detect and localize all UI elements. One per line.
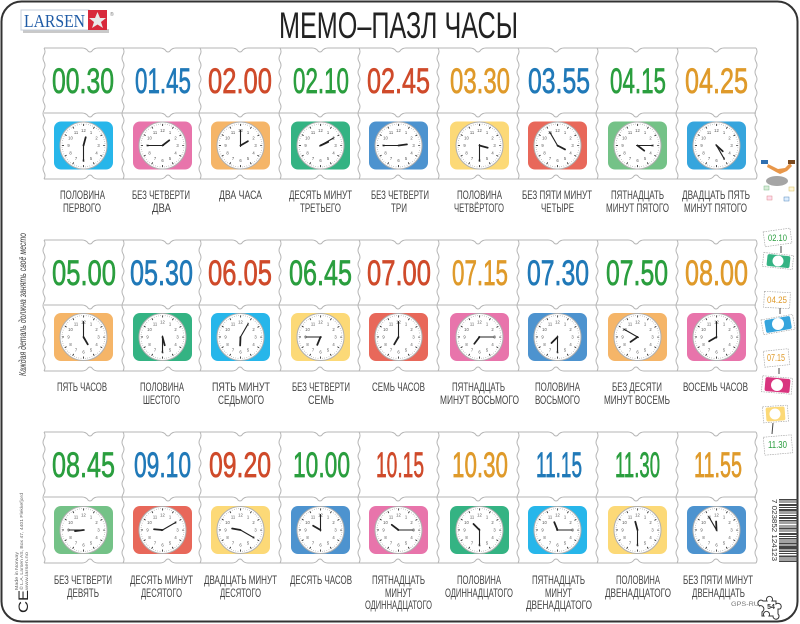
piece 07.00: 07.00 — [367, 254, 431, 293]
piece 03.30 — [450, 62, 510, 215]
piece 10.30: ОДИННАДЦАТОГО — [445, 586, 513, 600]
piece 04.15 — [606, 62, 669, 215]
piece 08.00: 08.00 — [685, 254, 748, 293]
piece 10.15 — [365, 446, 432, 612]
piece 03.55: 03.55 — [528, 62, 590, 101]
piece 02.45: БЕЗ ЧЕТВЕРТИ — [371, 188, 429, 202]
piece 10.30: ПОЛОВИНА — [457, 573, 501, 587]
piece 11.30 — [605, 446, 671, 600]
piece 02.00: 02.00 — [208, 62, 272, 101]
legal text, rotated: Made in Norway — [14, 551, 19, 590]
piece 11.55: ДВЕНАДЦАТЬ — [692, 586, 745, 600]
piece 09.20: ДЕСЯТОГО — [220, 586, 261, 600]
piece 07.50: БЕЗ ДЕСЯТИ — [612, 380, 662, 394]
piece 11.30: 11.30 — [615, 446, 660, 485]
piece 04.15: ПЯТНАДЦАТЬ — [611, 188, 664, 202]
piece 09.10: ДЕСЯТЬ МИНУТ — [130, 573, 193, 587]
piece 07.15 — [440, 254, 519, 407]
piece 07.30: 07.30 — [527, 254, 589, 293]
piece 02.10: ТРЕТЬЕГО — [300, 201, 341, 215]
piece 08.00 — [683, 254, 748, 394]
instruction pair: 11.30: 11.30 — [768, 440, 787, 451]
piece 01.45: БЕЗ ЧЕТВЕРТИ — [132, 188, 190, 202]
piece 09.20: ДВАДЦАТЬ МИНУТ — [204, 573, 277, 587]
piece 10.30: 10.30 — [452, 446, 508, 485]
piece 02.10 — [289, 62, 352, 215]
piece 06.45: СЕМЬ — [308, 393, 334, 407]
piece 05.00: ПЯТЬ ЧАСОВ — [57, 380, 107, 394]
piece 02.00 — [208, 62, 272, 202]
piece 06.45 — [289, 254, 352, 407]
instruction pair: 02.10 — [762, 228, 794, 270]
puzzle outline row 3 — [43, 432, 757, 563]
piece 03.55 — [522, 62, 592, 215]
piece 06.45: БЕЗ ЧЕТВЕРТИ — [292, 380, 350, 394]
legal text, rotated — [14, 493, 29, 590]
piece 00.30: ПОЛОВИНА — [60, 188, 105, 202]
piece 07.15: ПЯТНАДЦАТЬ — [452, 380, 505, 394]
piece 01.45: 01.45 — [135, 62, 191, 101]
piece 10.00: ДЕСЯТЬ ЧАСОВ — [290, 573, 352, 587]
logo: Larsen: ® — [110, 11, 114, 18]
piece 02.10: 02.10 — [293, 62, 349, 101]
piece 07.00: СЕМЬ ЧАСОВ — [372, 380, 425, 394]
instruction text, rotated: Каждая деталь должна занять своё место — [18, 233, 29, 376]
piece 05.30 — [130, 254, 193, 407]
barcode: 7 023852 124123 — [770, 499, 777, 561]
piece 07.50: МИНУТ ВОСЕМЬ — [604, 393, 670, 407]
logo: Larsen: LARSEN — [24, 11, 85, 31]
panel: row 2 — [43, 240, 757, 407]
piece 01.45: ДВА — [152, 201, 171, 215]
piece 07.50 — [604, 254, 670, 407]
piece 06.45: 06.45 — [289, 254, 352, 293]
instruction pair: 07.15: 07.15 — [767, 353, 785, 364]
CE mark: CE — [15, 590, 31, 613]
piece 05.30: ПОЛОВИНА — [140, 380, 184, 394]
piece 05.00 — [52, 254, 116, 394]
instruction pair: 04.25: 04.25 — [767, 295, 787, 305]
piece 03.30: ЧЕТВЁРТОГО — [454, 201, 504, 215]
piece 07.30 — [527, 254, 589, 407]
piece 01.45 — [132, 62, 192, 215]
piece 07.30: ПОЛОВИНА — [535, 380, 580, 394]
panel: row 1 — [43, 48, 757, 215]
instruction pair: 07.15 — [761, 349, 793, 394]
piece 07.30: ВОСЬМОГО — [535, 393, 580, 407]
piece 10.15: МИНУТ — [385, 586, 412, 600]
title: МЕМО–ПАЗЛ ЧАСЫ — [279, 5, 518, 46]
piece 05.30: 05.30 — [130, 254, 193, 293]
instruction pair: 11.30 — [762, 405, 793, 455]
piece 11.15: ДВЕНАДЦАТОГО — [526, 598, 592, 612]
legal text, rotated: www.larsen.no — [24, 551, 29, 590]
piece 08.45: ДЕВЯТЬ — [67, 586, 99, 600]
legal text, rotated: © L.A. Larsen AS, Box 47, 4401 Flekkefjord — [18, 493, 24, 590]
piece 08.45: БЕЗ ЧЕТВЕРТИ — [54, 573, 112, 587]
panel: row 3 — [43, 432, 757, 612]
piece 02.10: ДЕСЯТЬ МИНУТ — [289, 188, 352, 202]
piece 11.55: БЕЗ ПЯТИ МИНУТ — [683, 573, 753, 587]
piece 10.00 — [290, 446, 352, 587]
icon: puzzle piece count 54: 54 — [767, 604, 775, 611]
barcode — [770, 499, 788, 562]
piece 10.15: 10.15 — [376, 446, 424, 485]
piece 00.30 — [52, 62, 114, 215]
piece 07.15: 07.15 — [452, 254, 508, 293]
piece 04.25: МИНУТ ПЯТОГО — [684, 201, 747, 215]
piece 05.00: 05.00 — [52, 254, 116, 293]
piece 08.00: ВОСЕМЬ ЧАСОВ — [683, 380, 748, 394]
piece 07.50: 07.50 — [606, 254, 668, 293]
piece 02.45: 02.45 — [367, 62, 430, 101]
product code: GPS-RU — [731, 601, 759, 608]
piece 02.45: ТРИ — [391, 201, 407, 215]
icon: puzzle piece count 54 — [758, 596, 781, 619]
piece 02.00: ДВА ЧАСА — [219, 188, 262, 202]
piece 10.15: ОДИННАДЦАТОГО — [365, 598, 432, 612]
piece 11.15 — [526, 446, 592, 612]
piece 11.30: ПОЛОВИНА — [616, 573, 660, 587]
piece 03.55: БЕЗ ПЯТИ МИНУТ — [522, 188, 592, 202]
piece 04.25: ДВАДЦАТЬ ПЯТЬ — [682, 188, 750, 202]
piece 06.05: СЕДЬМОГО — [218, 393, 264, 407]
piece 04.25: 04.25 — [685, 62, 748, 101]
logo: Larsen — [21, 10, 114, 33]
piece 04.15: 04.15 — [610, 62, 666, 101]
piece 04.15: МИНУТ ПЯТОГО — [606, 201, 669, 215]
piece 00.30: 00.30 — [52, 62, 114, 101]
piece 11.55: 11.55 — [694, 446, 742, 485]
piece 09.20 — [204, 446, 277, 600]
piece 09.10: ДЕСЯТОГО — [141, 586, 182, 600]
piece 11.30: ДВЕНАДЦАТОГО — [605, 586, 671, 600]
piece 05.30: ШЕСТОГО — [143, 393, 180, 407]
piece 09.10: 09.10 — [134, 446, 191, 485]
piece 10.30 — [445, 446, 513, 600]
piece 11.15: МИНУТ — [545, 586, 572, 600]
piece 07.00 — [367, 254, 431, 394]
instruction pair: 02.10: 02.10 — [768, 233, 787, 243]
instruction illustration: hands placing pieces — [761, 160, 795, 201]
piece 03.30: 03.30 — [450, 62, 510, 101]
piece 11.15: ПЯТНАДЦАТЬ — [532, 573, 585, 587]
piece 10.00: 10.00 — [293, 446, 350, 485]
piece 03.30: ПОЛОВИНА — [457, 188, 502, 202]
piece 11.55 — [683, 446, 753, 600]
piece 03.55: ЧЕТЫРЕ — [541, 201, 574, 215]
instruction pair: 04.25 — [761, 291, 795, 335]
piece 08.45: 08.45 — [52, 446, 115, 485]
piece 11.15: 11.15 — [536, 446, 582, 485]
piece 00.30: ПЕРВОГО — [63, 201, 101, 215]
piece 09.10 — [130, 446, 193, 600]
piece 10.15: ПЯТНАДЦАТЬ — [372, 573, 425, 587]
piece 09.20: 09.20 — [209, 446, 271, 485]
piece 04.25 — [682, 62, 750, 215]
piece 06.05: ПЯТЬ МИНУТ — [212, 380, 270, 394]
puzzle outline row 1 — [43, 48, 757, 179]
piece 02.45 — [367, 62, 430, 215]
piece 08.45 — [52, 446, 115, 600]
piece 07.15: МИНУТ ВОСЬМОГО — [440, 393, 519, 407]
piece 06.05: 06.05 — [208, 254, 272, 293]
piece 06.05 — [208, 254, 272, 407]
puzzle outline row 2 — [43, 240, 757, 371]
